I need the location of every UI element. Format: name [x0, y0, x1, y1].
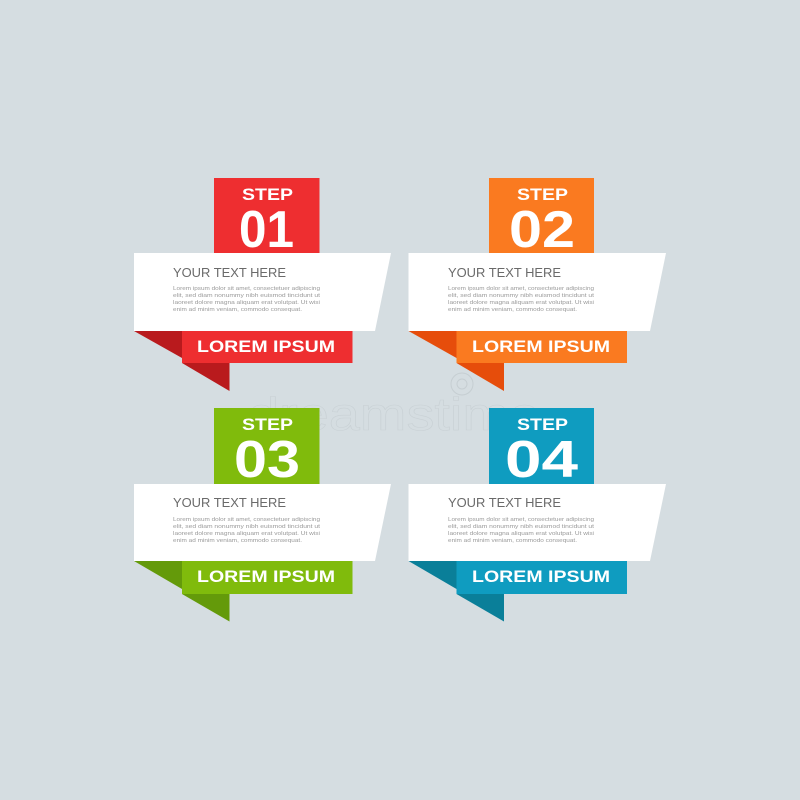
white text card: step 02: YOUR TEXT HERE	[448, 265, 561, 280]
step 04 badge: 04	[505, 431, 578, 489]
white text card: step 04: YOUR TEXT HERE	[448, 495, 561, 510]
white text card: step 03: YOUR TEXT HERE	[173, 495, 286, 510]
white text card: step 04: laoreet dolore magna aliquam erat volutpat. Ut wisi	[448, 531, 594, 537]
step 02 badge: STEP	[517, 185, 568, 204]
white text card: step 04: elit, sed diam nonummy nibh euismod tincidunt ut	[448, 524, 594, 530]
panel: step 01	[134, 178, 391, 391]
step 03 badge	[214, 408, 320, 489]
white text card: step 02: elit, sed diam nonummy nibh euismod tincidunt ut	[448, 293, 594, 299]
ribbon label: step 02: LOREM IPSUM	[472, 338, 610, 356]
white text card: step 02	[408, 253, 666, 331]
white text card: step 01: enim ad minim veniam, commodo consequat.	[173, 307, 302, 313]
ribbon label: step 04: LOREM IPSUM	[472, 568, 610, 586]
white text card: step 04: Lorem ipsum dolor sit amet, consectetuer adipiscing	[448, 517, 594, 523]
white text card: step 01	[134, 253, 391, 331]
white text card: step 01: laoreet dolore magna aliquam erat volutpat. Ut wisi	[173, 300, 320, 306]
white text card: step 03: laoreet dolore magna aliquam erat volutpat. Ut wisi	[173, 531, 320, 537]
ribbon label: step 01	[182, 331, 352, 363]
panel: step 03	[134, 408, 391, 622]
step 04 badge	[489, 408, 594, 489]
step 03 badge: 03	[234, 431, 300, 489]
ribbon label: step 04	[456, 561, 627, 594]
white text card: step 02: Lorem ipsum dolor sit amet, consectetuer adipiscing	[448, 286, 594, 292]
white text card: step 01: Lorem ipsum dolor sit amet, consectetuer adipiscing	[173, 286, 320, 292]
ribbon label: step 03	[182, 561, 352, 594]
step 04 badge: STEP	[517, 415, 568, 434]
ribbon fold: step 04	[408, 561, 504, 622]
white text card: step 03: Lorem ipsum dolor sit amet, consectetuer adipiscing	[173, 517, 320, 523]
ribbon fold: step 03	[134, 561, 230, 622]
white text card: step 03	[134, 484, 391, 561]
white text card: step 02: laoreet dolore magna aliquam erat volutpat. Ut wisi	[448, 300, 594, 306]
ribbon label: step 03: LOREM IPSUM	[197, 568, 335, 586]
white text card: step 01: YOUR TEXT HERE	[173, 265, 286, 280]
step 01 badge: STEP	[242, 185, 293, 204]
white text card: step 02: enim ad minim veniam, commodo consequat.	[448, 307, 577, 313]
step 01 badge: 01	[239, 201, 294, 259]
watermark	[248, 373, 540, 440]
white text card: step 04: enim ad minim veniam, commodo consequat.	[448, 538, 577, 544]
watermark: dreamstime	[248, 388, 540, 440]
ribbon label: step 01: LOREM IPSUM	[197, 338, 335, 356]
panel: step 04	[408, 408, 666, 622]
step 01 badge	[214, 178, 320, 259]
step 02 badge	[489, 178, 594, 259]
ribbon fold: step 01	[134, 331, 230, 391]
step 03 badge: STEP	[242, 415, 293, 434]
white text card: step 03: enim ad minim veniam, commodo consequat.	[173, 538, 302, 544]
white text card: step 03: elit, sed diam nonummy nibh euismod tincidunt ut	[173, 524, 320, 530]
white text card: step 04	[408, 484, 666, 561]
step 02 badge: 02	[509, 201, 575, 259]
ribbon fold: step 02	[408, 331, 504, 391]
panel: step 02	[408, 178, 666, 391]
white text card: step 01: elit, sed diam nonummy nibh euismod tincidunt ut	[173, 293, 320, 299]
ribbon label: step 02	[456, 331, 627, 363]
